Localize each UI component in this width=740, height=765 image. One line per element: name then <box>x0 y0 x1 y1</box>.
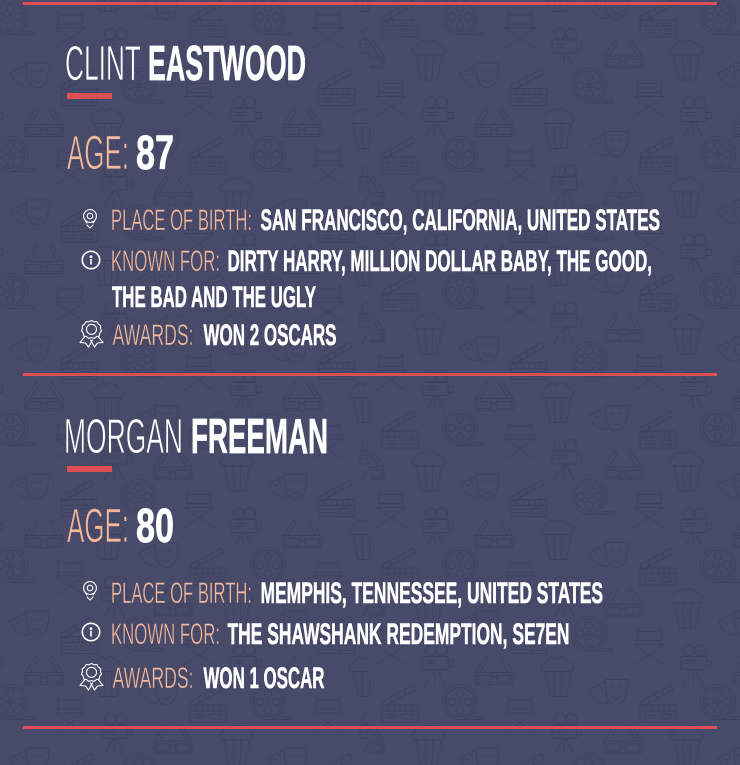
film icon pattern right <box>370 0 740 765</box>
heading: Morgan Freeman: FREEMAN <box>191 410 328 464</box>
age: AGE: <box>67 500 129 553</box>
place of birth <box>111 204 660 237</box>
heading underline <box>67 466 112 472</box>
icon: info <box>82 623 100 641</box>
heading: Morgan Freeman: MORGAN <box>64 410 183 464</box>
place of birth: PLACE OF BIRTH: <box>111 577 252 610</box>
awards <box>112 319 336 352</box>
icon: info <box>82 251 100 269</box>
heading: Clint Eastwood <box>65 37 306 91</box>
age: 80 <box>136 500 174 553</box>
known for: THE BAD AND THE UGLY <box>112 281 316 314</box>
middle divider <box>23 373 717 376</box>
awards <box>112 662 325 695</box>
icon: award <box>80 664 103 690</box>
awards: WON 2 OSCARS <box>204 319 336 352</box>
icon: location pin <box>84 210 96 228</box>
heading: Clint Eastwood: EASTWOOD <box>148 37 306 91</box>
known for <box>111 245 652 314</box>
panel: Morgan Freeman <box>64 410 603 695</box>
awards: AWARDS: <box>112 662 194 695</box>
age: 87 <box>136 127 174 180</box>
place of birth <box>111 577 603 610</box>
heading underline <box>67 93 112 99</box>
film icon pattern left <box>0 0 370 765</box>
known for: KNOWN FOR: <box>111 618 220 651</box>
place of birth: PLACE OF BIRTH: <box>111 204 252 237</box>
known for <box>111 618 570 651</box>
awards: WON 1 OSCAR <box>204 662 325 695</box>
panel: Clint Eastwood <box>65 37 660 352</box>
heading: Clint Eastwood: CLINT <box>65 37 141 91</box>
awards: AWARDS: <box>112 319 194 352</box>
known for: KNOWN FOR: <box>111 245 220 278</box>
bottom divider <box>23 726 717 729</box>
icon: location pin <box>84 582 96 600</box>
top divider <box>23 2 717 5</box>
icon: award <box>80 320 103 347</box>
age: AGE: <box>67 127 129 180</box>
